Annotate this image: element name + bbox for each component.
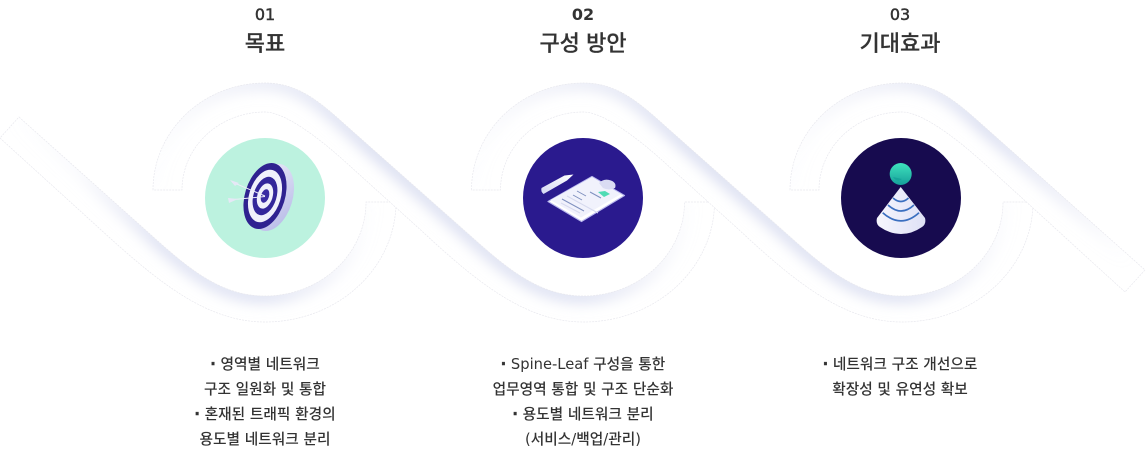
icon: target with arrows <box>205 138 325 258</box>
heading: composition plan: 구성 방안 <box>539 26 627 58</box>
text block: composition details: 업무영역 통합 및 구조 단순화 <box>493 381 673 398</box>
column: 02 composition <box>493 5 673 448</box>
icon: clipboard and pen <box>523 138 643 258</box>
heading: goal: 목표 <box>245 26 285 58</box>
text block: goal details <box>194 356 336 448</box>
text block: effect details: 확장성 및 유연성 확보 <box>832 381 968 398</box>
text block: goal details: · 영역별 네트워크 <box>210 356 320 373</box>
text block: composition details <box>493 356 673 448</box>
text block: composition details: · Spine-Leaf 구성을 통한 <box>501 356 665 373</box>
ribbon band: composition to effect <box>472 83 1033 322</box>
text block: effect details: · 네트워크 구조 개선으로 <box>823 356 977 373</box>
ribbon path background <box>0 82 1145 322</box>
icon: cone with signal ball <box>841 138 961 258</box>
text block: goal details: 구조 일원화 및 통합 <box>204 381 326 398</box>
ribbon band: goal to composition <box>153 83 714 322</box>
text block: effect details <box>823 356 977 398</box>
step number 01: 01 <box>255 5 275 24</box>
step number 03: 03 <box>890 5 910 24</box>
text block: composition details: (서비스/백업/관리) <box>525 431 641 448</box>
text block: goal details: 용도별 네트워크 분리 <box>200 431 330 448</box>
text block: goal details: · 혼재된 트래픽 환경의 <box>194 406 336 423</box>
ribbon band: effect tail <box>790 83 1145 292</box>
heading: expected effects: 기대효과 <box>860 26 940 58</box>
text block: composition details: · 용도별 네트워크 분리 <box>512 406 654 423</box>
ribbon band: intro to goal <box>0 117 396 322</box>
step number 02: 02 <box>572 5 594 24</box>
column: 03 expected effects <box>823 5 977 398</box>
column: 01 goal <box>194 5 336 448</box>
